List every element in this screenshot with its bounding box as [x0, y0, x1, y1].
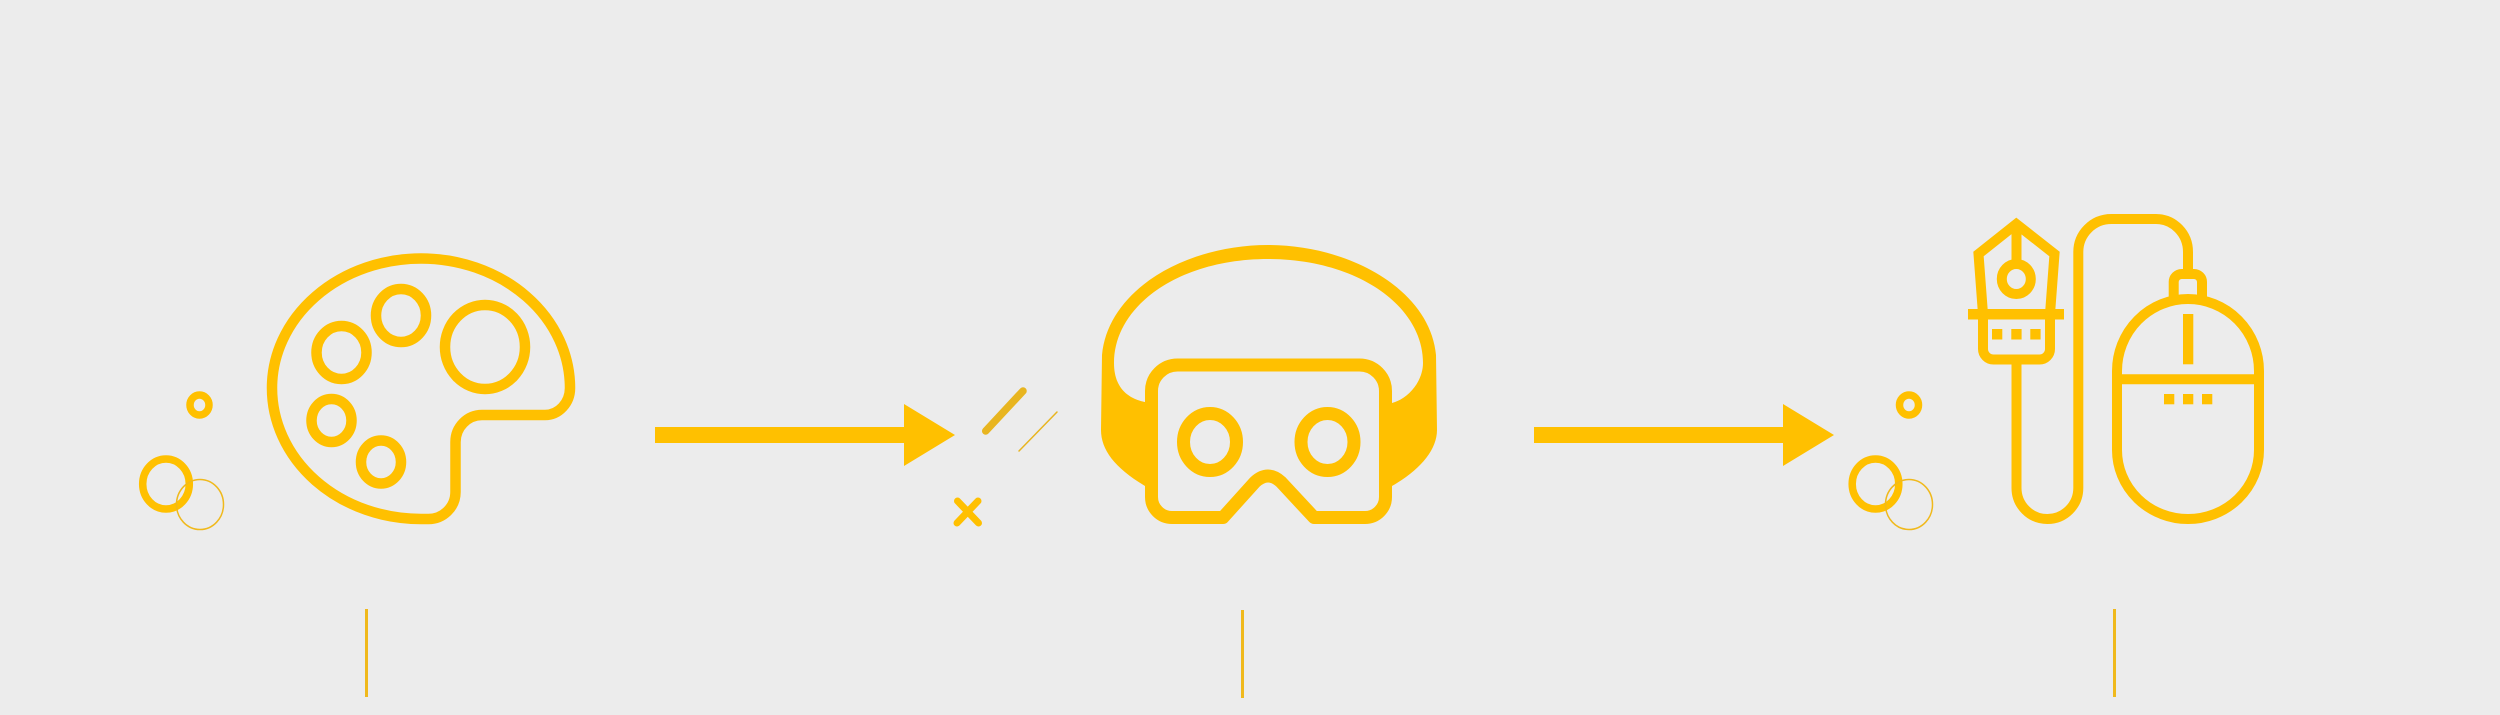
- arrow: palette to headset: [655, 404, 955, 466]
- left lens: [1184, 414, 1236, 470]
- icon: VR headset: [1101, 245, 1437, 518]
- bottom tick: column two: [1241, 610, 1244, 698]
- arrow: headset to tools: [1534, 404, 1834, 466]
- cable linking pen and mouse: [2016, 219, 2188, 519]
- icon: decorative circles left: [143, 395, 224, 530]
- icon: decorative circles right: [1852, 395, 1932, 530]
- icon: computer mouse: [2117, 274, 2259, 519]
- goggle body: [1152, 365, 1386, 518]
- decorative slashes: [986, 391, 1057, 451]
- decorative cross: [957, 501, 978, 523]
- right lens: [1301, 414, 1354, 470]
- icon: pen nib tool: [1968, 224, 2064, 360]
- headset strap: [1101, 245, 1437, 486]
- bottom tick: column three: [2113, 609, 2116, 697]
- bottom tick: column one: [365, 609, 368, 697]
- icon: paint palette: [272, 258, 570, 519]
